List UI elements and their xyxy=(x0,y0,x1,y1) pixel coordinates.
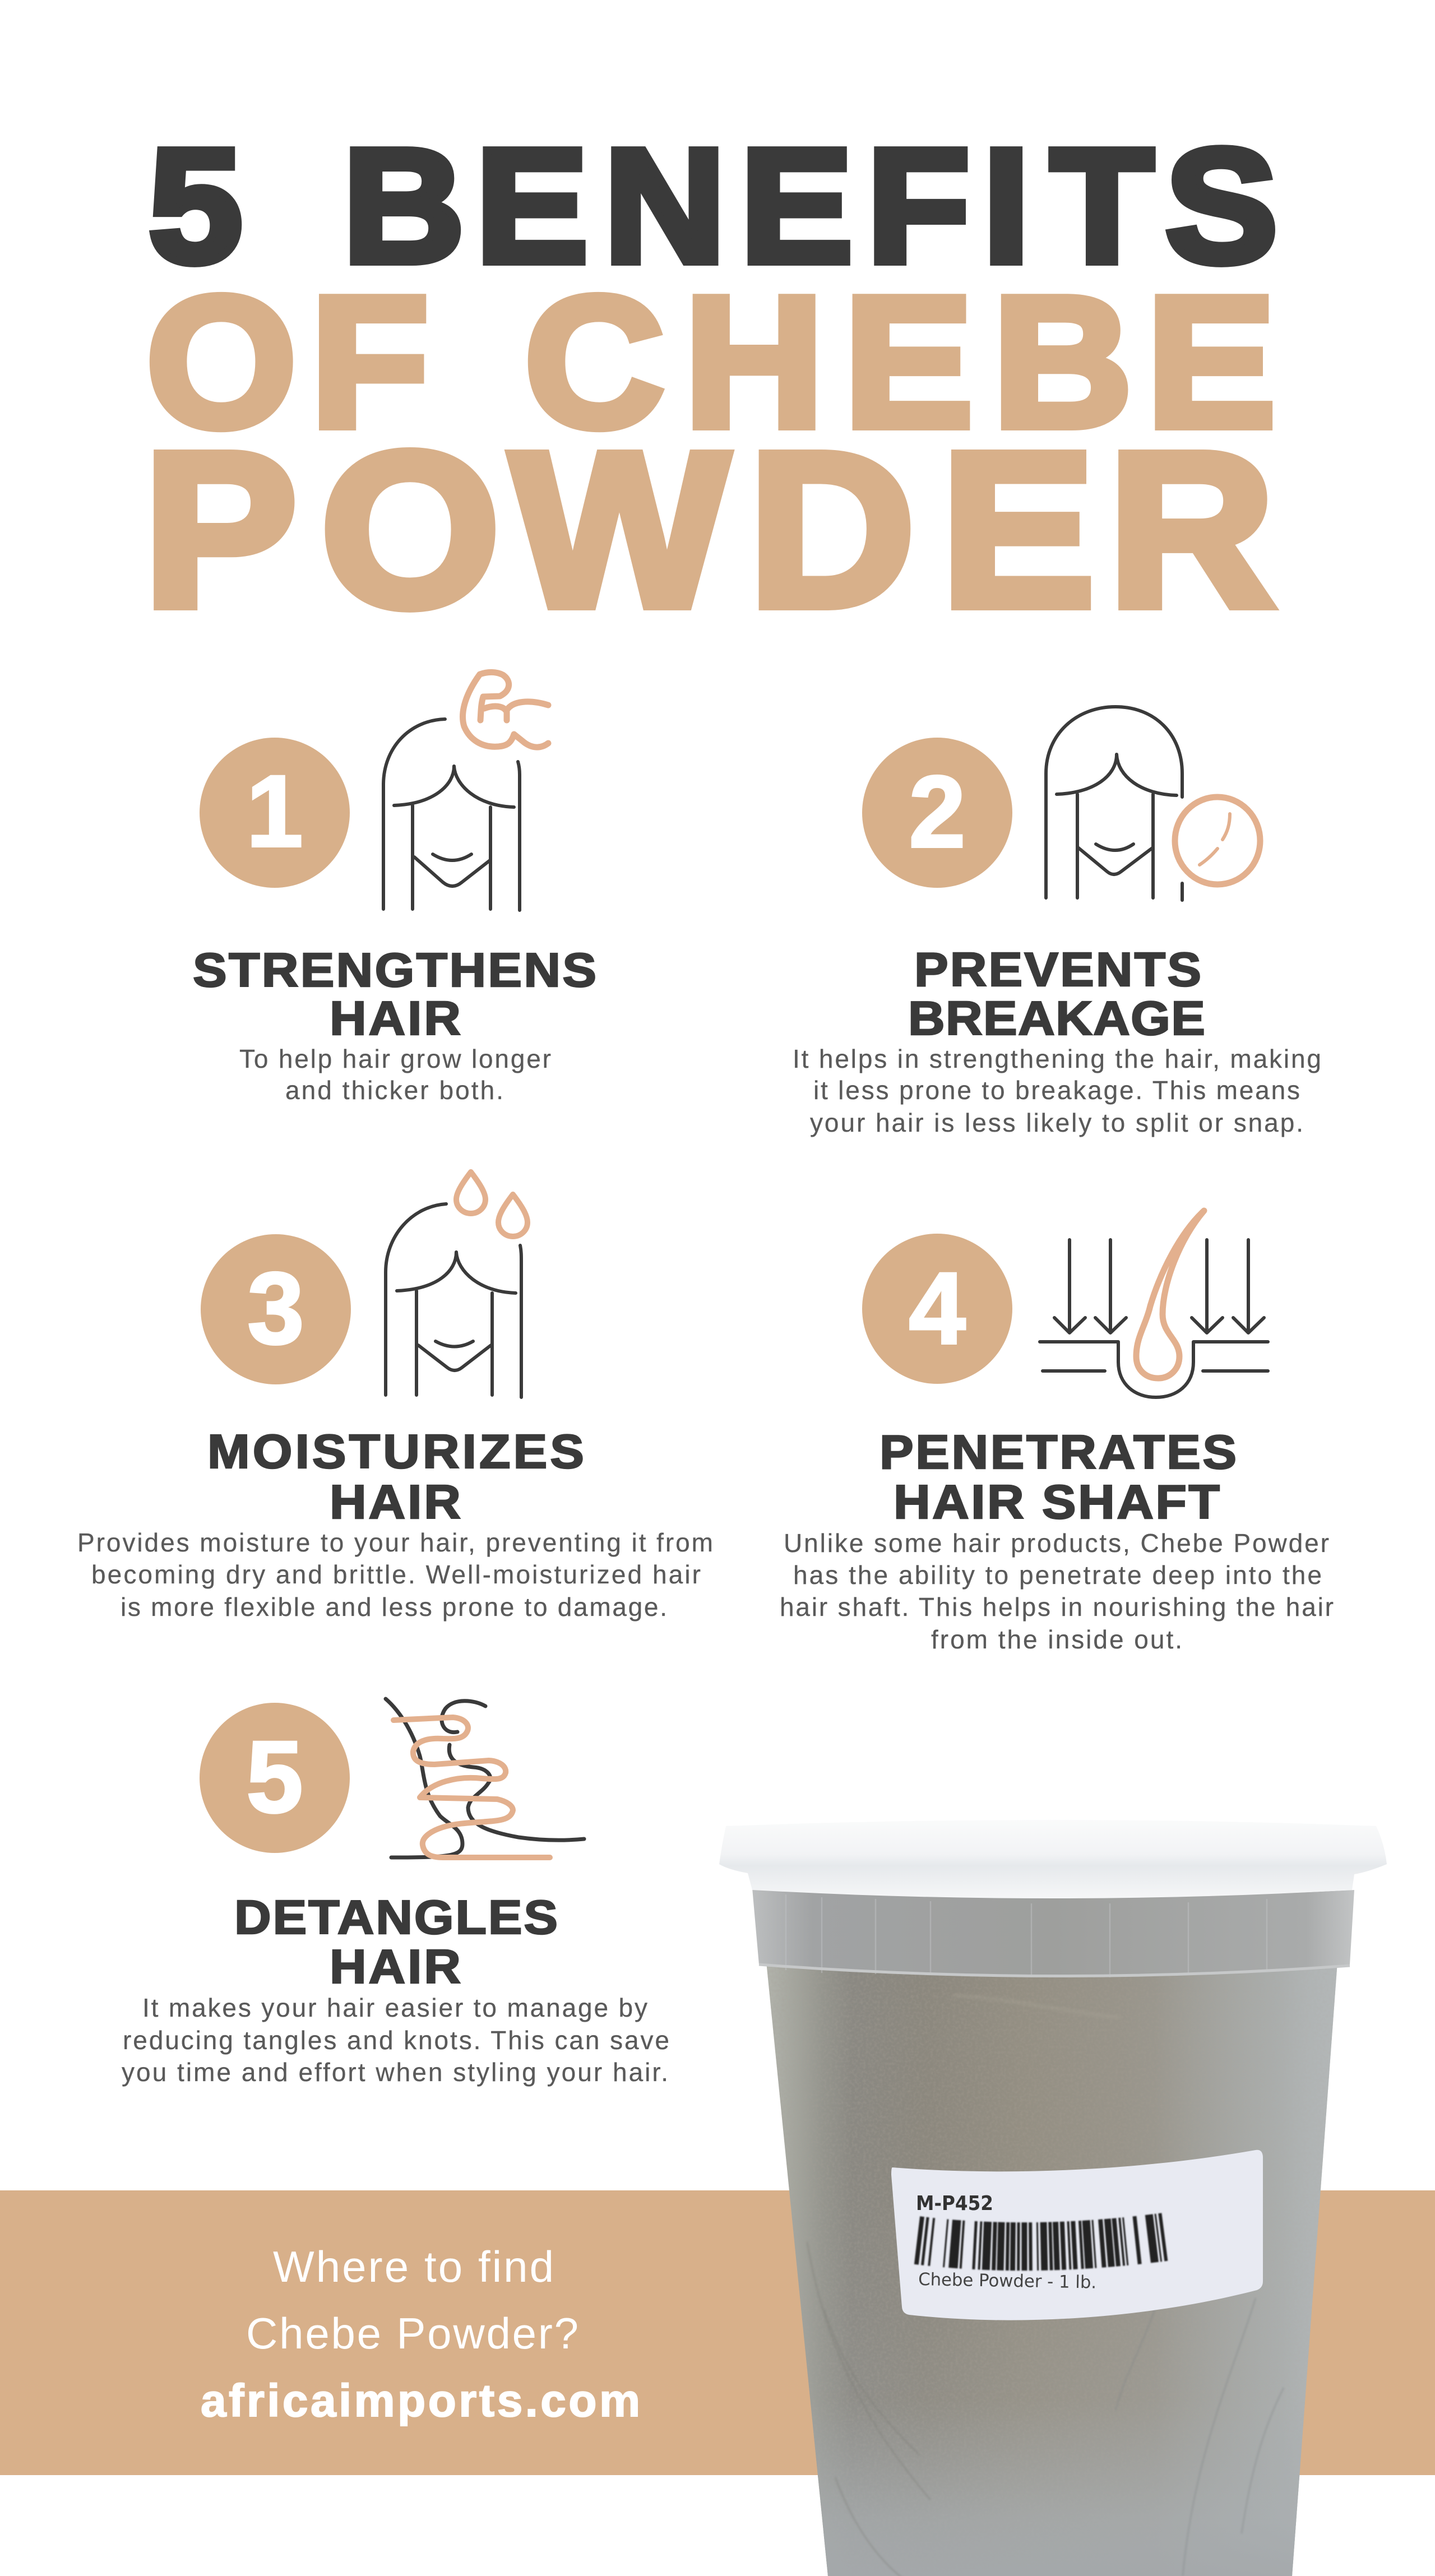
text block: hair shaft. This helps in nourishing the hair xyxy=(780,1592,1334,1621)
heading: HAIR xyxy=(330,1940,461,1993)
number badge 2 xyxy=(862,738,1012,888)
text block: It makes your hair easier to manage by xyxy=(142,1993,647,2022)
text block: reducing tangles and knots. This can save xyxy=(123,2026,669,2055)
title line: 5 BENEFITS: 5 BENEFITS xyxy=(149,115,1277,296)
number badge 3 xyxy=(201,1234,351,1384)
text block xyxy=(122,1993,669,2087)
panel: benefit 1 strengthens hair xyxy=(193,672,596,1105)
text block xyxy=(239,1044,551,1105)
text block: has the ability to penetrate deep into the xyxy=(793,1560,1322,1590)
tub lid xyxy=(719,1820,1387,1898)
title line: OF CHEBE: OF CHEBE xyxy=(146,258,1275,466)
panel: where to find banner xyxy=(0,2190,1435,2475)
number badge 1 xyxy=(200,738,350,888)
text block xyxy=(780,1528,1334,1654)
text block: your hair is less likely to split or snap. xyxy=(810,1108,1303,1137)
banner text xyxy=(201,2242,640,2426)
icon: woman with magnified broken hair xyxy=(1046,707,1260,900)
panel: benefit 4 penetrates hair shaft xyxy=(780,1211,1334,1654)
banner text: Chebe Powder? xyxy=(246,2309,578,2358)
text block: It helps in strengthening the hair, making xyxy=(793,1044,1321,1073)
tub label xyxy=(891,2150,1263,2320)
label code: M-P452 xyxy=(916,2192,993,2215)
text block: becoming dry and brittle. Well-moisturized hair xyxy=(91,1560,701,1589)
heading xyxy=(193,943,596,1045)
heading xyxy=(908,943,1205,1045)
text block: it less prone to breakage. This means xyxy=(813,1076,1300,1105)
number badge 2: 2 xyxy=(909,754,966,869)
heading xyxy=(207,1425,584,1528)
barcode xyxy=(917,2237,1165,2246)
heading xyxy=(879,1425,1237,1528)
label product name: Chebe Powder - 1 lb. xyxy=(918,2269,1096,2293)
text block: you time and effort when styling your hair. xyxy=(122,2058,668,2087)
icon: tangled hair strands xyxy=(386,1699,584,1857)
product photo: chebe powder tub xyxy=(719,1820,1387,2576)
banner text: Where to find xyxy=(273,2242,554,2291)
heading: HAIR xyxy=(330,992,461,1045)
number badge 3: 3 xyxy=(247,1251,304,1365)
heading: BREAKAGE xyxy=(908,992,1205,1045)
number badge 4: 4 xyxy=(909,1251,966,1365)
heading: DETANGLES xyxy=(234,1891,558,1944)
heading xyxy=(234,1891,558,1993)
heading: HAIR xyxy=(330,1475,461,1528)
number badge 4 xyxy=(862,1234,1012,1384)
tub body xyxy=(762,1962,1345,2576)
text block: Unlike some hair products, Chebe Powder xyxy=(784,1528,1329,1558)
icon: arrows into hair follicle xyxy=(1040,1211,1268,1397)
heading: HAIR SHAFT xyxy=(894,1475,1220,1528)
text block xyxy=(77,1528,713,1621)
panel: benefit 5 detangles hair xyxy=(122,1699,669,2087)
icon: woman with flexed arm xyxy=(383,672,548,910)
text block: To help hair grow longer xyxy=(239,1044,551,1073)
heading: PENETRATES xyxy=(879,1425,1237,1479)
heading: STRENGTHENS xyxy=(193,943,596,997)
number badge 5: 5 xyxy=(246,1720,303,1834)
text block: Provides moisture to your hair, preventing it from xyxy=(77,1528,713,1557)
number badge 5 xyxy=(200,1703,350,1853)
panel: benefit 2 prevents breakage xyxy=(793,707,1321,1137)
heading: MOISTURIZES xyxy=(207,1425,584,1478)
panel: benefit 3 moisturizes hair xyxy=(77,1172,713,1621)
text block: and thicker both. xyxy=(285,1076,503,1105)
banner text: africaimports.com xyxy=(201,2375,640,2426)
title xyxy=(144,115,1277,652)
tub rim band xyxy=(752,1888,1354,1977)
text block: from the inside out. xyxy=(931,1625,1182,1654)
number badge 1: 1 xyxy=(246,754,303,868)
text block xyxy=(793,1044,1321,1137)
text block: is more flexible and less prone to damage. xyxy=(121,1592,667,1621)
title line: POWDER: POWDER xyxy=(144,407,1275,652)
icon: woman with water drops xyxy=(386,1172,527,1397)
heading: PREVENTS xyxy=(914,943,1201,996)
